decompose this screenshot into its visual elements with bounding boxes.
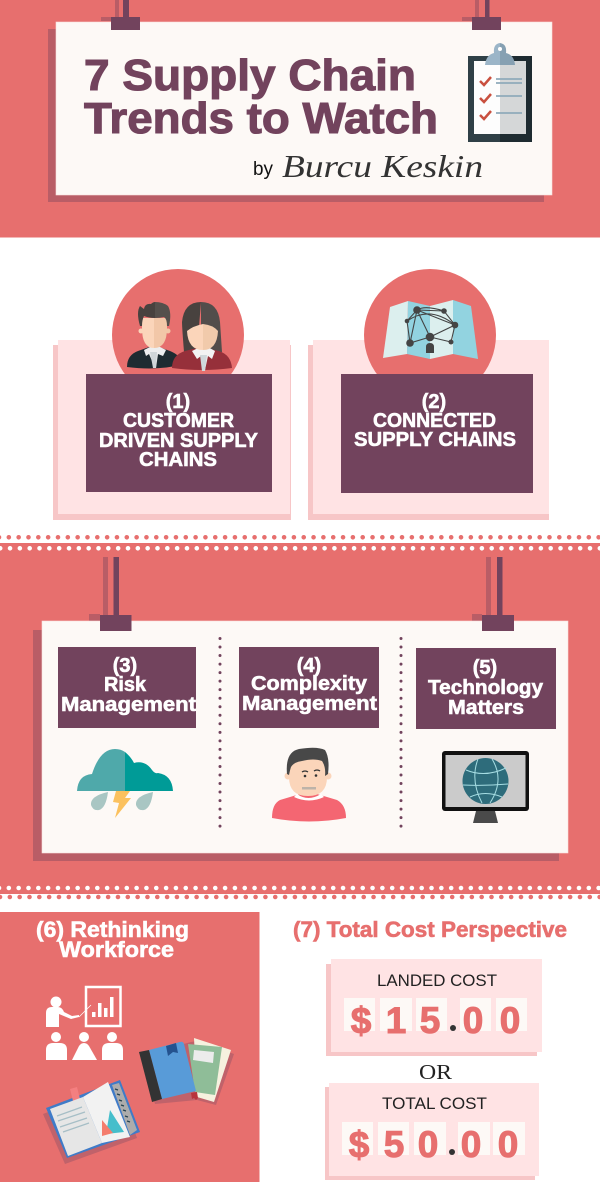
left hanger shadow [101,0,119,21]
icon: network map [383,300,478,359]
amount: 0 [500,1000,520,1041]
byline: Burcu Keskin [282,148,483,184]
title text: (2) [422,391,446,413]
title text: Matters [448,697,524,719]
right hanger shadow [462,0,479,21]
title text [61,655,196,716]
title text: (4) [297,655,321,677]
card label: TOTAL COST [382,1095,487,1113]
heading: (7) Total Cost Perspective [293,917,567,942]
title text: (5) [473,657,497,679]
right hanger [482,557,514,631]
title box [86,374,272,492]
title board [56,22,552,195]
middle band [0,543,600,894]
title text: (3) [113,655,137,677]
panel: rethinking workforce [0,912,260,1182]
title: Trends to Watch [84,94,438,143]
title text [354,391,516,451]
title text [242,655,377,715]
title text [428,657,544,719]
digit tiles [344,998,527,1031]
icon: worried man [272,748,346,822]
icon: open notebook [43,1080,140,1164]
title text: Risk [104,674,147,696]
amount: 0 [418,1124,438,1165]
amount [351,1000,520,1041]
amount: 1 [386,1000,406,1041]
board shadow [33,630,559,861]
card: landed cost [326,959,542,1056]
icon: closed books [139,1038,234,1105]
amount: 0 [498,1124,518,1165]
title text: Management [242,693,377,715]
icon: two people [127,302,232,371]
title text: CHAINS [139,448,217,471]
icon: storm cloud [77,749,173,818]
title text: CONNECTED [373,409,496,432]
title box [58,647,196,728]
digit tiles [342,1122,525,1155]
title board shadow [48,29,544,202]
left hanger shadow [89,557,108,621]
panel: total cost perspective [293,917,567,1180]
board [42,621,568,853]
title box [416,648,556,729]
icon circle [364,269,496,401]
title text: SUPPLY CHAINS [354,428,516,451]
amount: 5 [420,1000,440,1041]
amount [349,1124,518,1165]
title box [341,374,533,493]
icon: monitor with globe [442,751,529,823]
card label: LANDED COST [377,972,497,990]
title box [239,647,379,728]
amount: 0 [461,1124,481,1165]
heading: Workforce [59,937,174,962]
trend 3: risk management [58,647,196,818]
panel: connected supply chains [308,269,549,520]
amount: 0 [463,1000,483,1041]
amount: $ [351,1000,372,1041]
heading [36,917,189,962]
title text: CUSTOMER [123,409,234,432]
title text: DRIVEN SUPPLY [99,429,258,452]
left hanger [100,557,132,631]
icon: presenter and audience [46,987,123,1060]
or divider: OR [419,1060,452,1084]
byline: by [253,159,273,180]
right hanger [472,0,501,30]
title text: Complexity [251,673,368,695]
icon circle [112,269,244,401]
amount: $ [349,1124,370,1165]
heading: (6) Rethinking [36,917,189,942]
left hanger [111,0,140,30]
panel: customer driven supply chains [53,269,291,520]
title text: (1) [166,391,190,413]
title text [99,391,258,471]
icon: clipboard [468,43,532,142]
amount: 5 [384,1124,404,1165]
title [84,51,438,143]
header band [0,0,600,238]
title text: Technology [428,677,544,699]
right hanger shadow [472,557,491,621]
trend 5: technology matters [416,648,556,823]
title text: Management [61,694,196,716]
title: 7 Supply Chain [84,51,416,100]
card: total cost [325,1083,539,1180]
trend 4: complexity management [239,647,379,822]
